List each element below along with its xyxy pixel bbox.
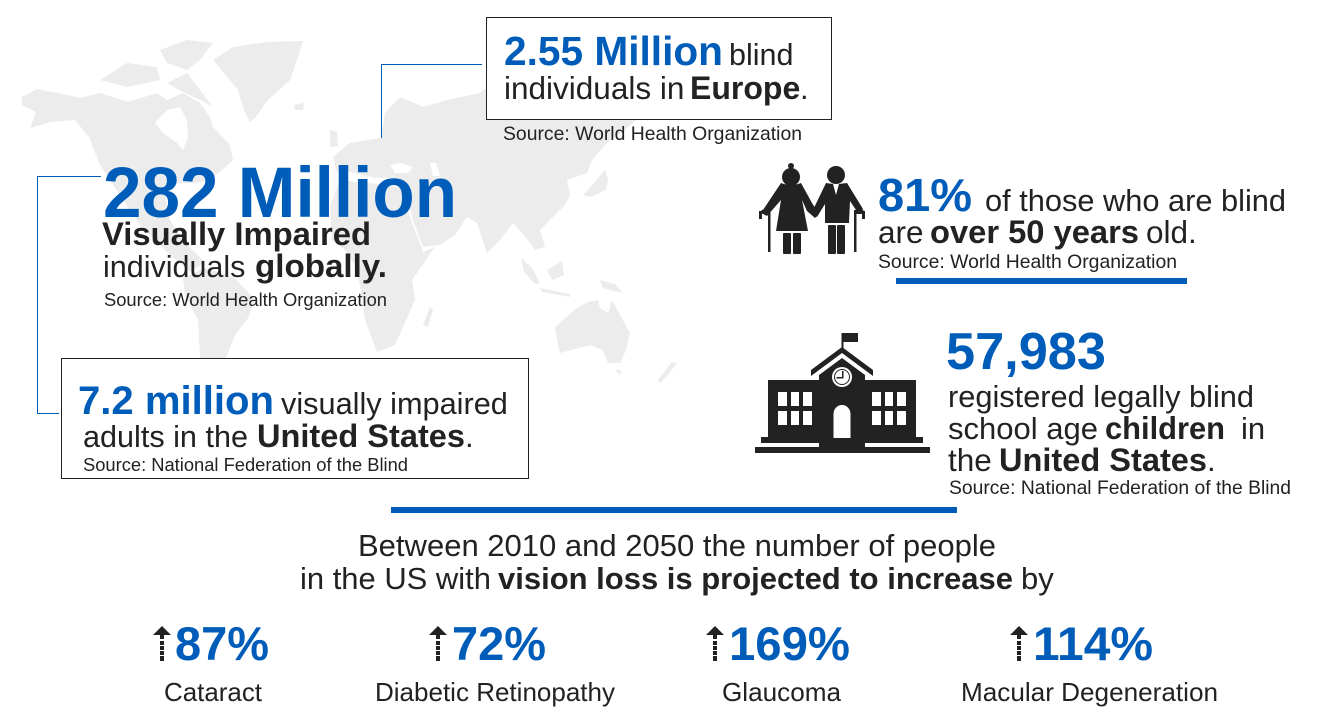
heading: projection: in the US with — [300, 561, 491, 596]
headline: 282 Million: Visually Impaired — [102, 215, 371, 252]
stat: glaucoma: Glaucoma — [722, 677, 842, 707]
stat: 81 percent: of those who are blind — [985, 183, 1286, 218]
headline: 282 Million: 282 Million — [103, 154, 457, 233]
stat: 57,983 children: . — [1207, 443, 1216, 478]
stat: macular degeneration: 114% — [1033, 617, 1153, 670]
stat: diabetic retinopathy: 72% — [452, 617, 546, 670]
stat: 57,983 children: children — [1105, 410, 1225, 446]
stat: diabetic retinopathy — [375, 617, 615, 707]
stat: 81 percent: 81% — [878, 169, 972, 221]
stat: 57,983 children: in — [1241, 411, 1265, 446]
callout: United States: adults in the — [83, 420, 248, 454]
icon: up arrow — [429, 626, 447, 661]
heading: projection: Between 2010 and 2050 the number of people — [358, 528, 996, 563]
source: Europe: Source: World Health Organization — [503, 123, 802, 145]
callout: United States: Source: National Federation of the Blind — [83, 454, 408, 475]
icon: up arrow — [1010, 626, 1028, 661]
stat: 57,983 children: 57,983 — [946, 323, 1106, 381]
stat: cataract — [153, 617, 269, 707]
stat: cataract: Cataract — [164, 677, 263, 707]
callout: United States: . — [465, 419, 474, 454]
callout: United States: United States — [257, 418, 465, 454]
stat: 57,983 children: Source: National Federation of the Blind — [949, 478, 1291, 499]
stat: macular degeneration — [961, 617, 1218, 707]
stat: diabetic retinopathy: Diabetic Retinopathy — [375, 677, 615, 707]
divider: above projection — [391, 507, 957, 513]
stat: 57,983 children: the — [948, 442, 992, 478]
headline: 282 Million: globally. — [255, 248, 387, 284]
icon: elderly couple — [759, 163, 865, 254]
headline: 282 Million: Source: World Health Organization — [104, 289, 387, 310]
stat: macular degeneration: Macular Degeneration — [961, 677, 1218, 707]
callout: Europe — [486, 18, 832, 120]
stat: 57,983 children: United States — [999, 442, 1207, 478]
heading: projection — [300, 528, 1054, 596]
world map background — [22, 40, 677, 383]
stat: 57,983 children: registered legally blind — [948, 379, 1254, 414]
callout: Europe: individuals in — [504, 70, 684, 106]
icon: up arrow — [706, 626, 724, 661]
stat: glaucoma: 169% — [729, 617, 850, 670]
callout: United States: visually impaired — [281, 386, 508, 421]
headline: 282 Million — [102, 154, 457, 310]
icon: school building — [755, 333, 930, 453]
headline: 282 Million: individuals — [103, 250, 245, 284]
callout: United States: 7.2 million — [78, 379, 274, 423]
stat: 81 percent: old. — [1146, 214, 1197, 250]
stat: 81 percent: are — [878, 214, 924, 250]
stat: 57,983 children: school age — [948, 411, 1098, 446]
divider: right column — [896, 278, 1187, 284]
callout: Europe: blind — [729, 38, 793, 72]
callout: Europe: Europe — [690, 70, 800, 106]
connector: United States callout — [38, 176, 101, 414]
stat: 81 percent: over 50 years — [930, 213, 1139, 250]
stat: 81 percent — [878, 169, 1286, 273]
connector: Europe callout — [382, 64, 482, 138]
icon: up arrow — [153, 626, 171, 661]
heading: projection: vision loss is projected to increase — [498, 561, 1013, 596]
stat: cataract: 87% — [175, 617, 269, 670]
callout: Europe: 2.55 Million — [504, 28, 723, 74]
stat: 81 percent: Source: World Health Organization — [878, 251, 1177, 273]
heading: projection: by — [1021, 561, 1054, 596]
callout: Europe: . — [800, 71, 809, 106]
stat: glaucoma — [706, 617, 850, 707]
stat: 57,983 children — [946, 323, 1291, 499]
callout: United States — [62, 358, 528, 478]
